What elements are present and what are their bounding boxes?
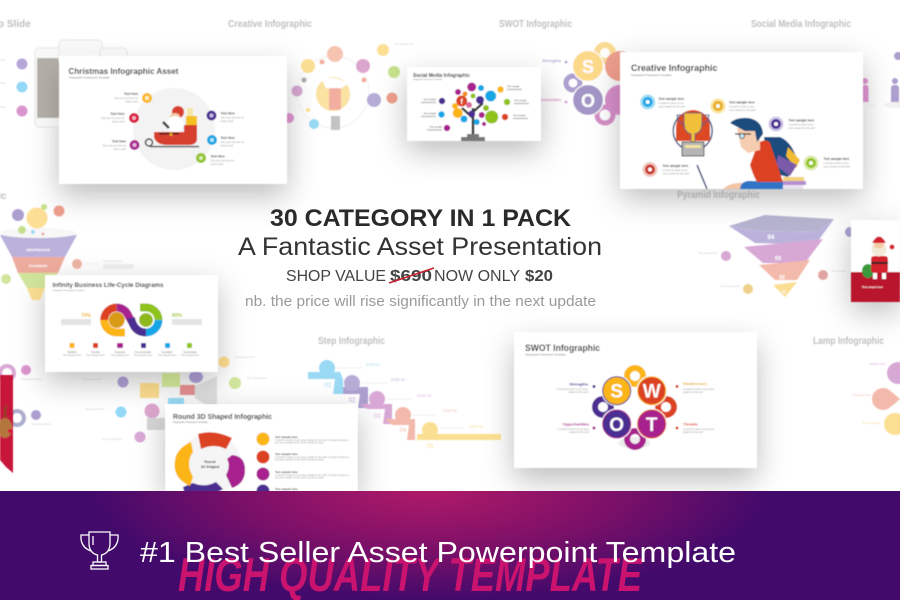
faded megaphone diagram: Text sample here [235, 355, 255, 359]
SWOT labels: details for this stuff [568, 391, 588, 394]
faded gears [0, 366, 24, 425]
six feature columns: Text sample here [111, 354, 130, 357]
SWOT labels: Opportunities [563, 422, 590, 426]
faded people icons [854, 52, 900, 108]
target labels: It would be better to put [662, 169, 688, 172]
faded step diagram: 04 [400, 428, 407, 434]
faded title: lamp: Lamp Infographic [813, 336, 884, 347]
faded funnel diagram [0, 204, 134, 300]
Santa slide text: Text sample here [862, 285, 884, 289]
round list items [256, 432, 350, 498]
labels around sleigh: better result [125, 100, 138, 104]
round segment chart [175, 432, 245, 497]
icon: trophy [81, 532, 118, 569]
target labels: It would be better to put [824, 162, 849, 165]
creative heading: Creative Infographic [631, 63, 718, 74]
target icons [640, 94, 818, 177]
target labels: Text sample here [788, 118, 815, 122]
labels around sleigh: Text Here [210, 154, 225, 158]
faded megaphone diagram: Text sample here [247, 376, 267, 380]
faded SWOT diagram: O [581, 91, 595, 111]
SWOT labels: It would be better to put some [683, 388, 715, 391]
labels around sleigh: Give your text here for [102, 144, 126, 148]
labels around sleigh: better result [220, 120, 233, 123]
six feature columns: Exquisite [115, 351, 126, 354]
target labels: some details for this stuff [729, 109, 756, 112]
Santa figure [862, 236, 894, 279]
faded megaphone diagram: Text sample here [102, 437, 122, 441]
six feature columns: Text sample here [134, 354, 153, 357]
SWOT labels: details for this stuff [569, 431, 589, 434]
SWOT clover: T [646, 415, 658, 436]
labels around sleigh: better result [113, 148, 126, 151]
panel: Creative infographic [620, 52, 863, 189]
faded title: pyramid: Pyramid Infographic [677, 190, 760, 201]
price line: SHOP VALUE [286, 268, 386, 285]
faded lamp diagram [852, 362, 900, 435]
target labels: some details for this stuff [662, 172, 689, 176]
social globe diagram [284, 42, 414, 130]
labels around sleigh [101, 92, 244, 166]
price line [286, 268, 553, 285]
faded pyramid diagram: 03 [775, 256, 781, 262]
round list items: Text sample here [275, 487, 298, 491]
six feature columns: Incredible [161, 351, 173, 354]
percent callouts [61, 313, 202, 325]
headline: fantastic asset: A Fantastic Asset Presentation [238, 233, 602, 261]
SWOT heading: SWOT Infographic [525, 343, 600, 353]
labels around sleigh: Text Here [220, 112, 235, 116]
labels around sleigh: Give your text here for [220, 116, 244, 120]
price note: nb. the price will rise significantly in the next update [245, 293, 596, 310]
headline: 30 category: 30 CATEGORY IN 1 PACK [270, 205, 572, 232]
faded background slides [0, 19, 900, 450]
labels around sleigh: Text Here [110, 112, 125, 116]
price line: NOW ONLY [434, 268, 520, 285]
social icons and labels: Text sample [513, 114, 526, 117]
faded step diagram: STEP 04 [443, 409, 457, 413]
faded megaphone diagram: Text sample here [85, 407, 105, 411]
social icons and labels: Text sample [424, 98, 437, 101]
SWOT clover: W [643, 382, 661, 402]
infinity heading: Infinity Business Life-Cycle Diagrams [52, 282, 164, 289]
faded SWOT diagram: Strengths [542, 58, 562, 63]
social heading: Social Media Infographic [413, 73, 470, 79]
faded lamp diagram: Template here [852, 393, 871, 397]
target labels: Text sample here [729, 100, 755, 104]
six feature columns: Sustainable [183, 351, 197, 354]
faded pyramid diagram [698, 215, 855, 297]
target labels [658, 97, 850, 176]
SWOT labels: It would be better to put some [556, 388, 589, 391]
left icons column: here [0, 105, 6, 109]
SWOT labels: Strengths [569, 382, 589, 386]
target labels: Text sample here [658, 97, 685, 101]
social icons and labels: Text sample [430, 126, 443, 128]
faded megaphone diagram: Text sample here [82, 377, 102, 381]
panel: Christmas infographic [59, 56, 287, 184]
grey circle backdrop [133, 88, 215, 170]
round segment chart: 3D Shaped [201, 465, 219, 469]
faded title: creative: Creative Infographic [228, 19, 312, 30]
six feature columns: Text sample here [181, 354, 200, 357]
round list items: put some details for the stuff it would be better [275, 458, 324, 462]
round list items: Text sample here [275, 470, 298, 474]
panel: SWOT infographic [514, 332, 757, 468]
tree chart: f [461, 99, 464, 106]
creative subtitle: Infographic Powerpoint Template [631, 73, 672, 77]
six feature columns: Reliable [67, 351, 77, 354]
faded pyramid diagram: 04 [768, 235, 775, 241]
panel: Social Media infographic [407, 67, 541, 141]
target labels: It would be better to put [788, 124, 814, 126]
infinity subtitle: Infographic Powerpoint Template [52, 289, 85, 292]
faded step diagram: STEP 05 [469, 425, 483, 429]
six feature columns [63, 343, 200, 357]
faded pyramid diagram: Text sample here [720, 284, 741, 288]
labels around sleigh: Text Here [124, 92, 138, 96]
Christmas heading: Christmas Infographic Asset [68, 66, 179, 76]
round list items: Text sample here [275, 452, 298, 456]
SWOT labels [556, 381, 715, 434]
faded lamp diagram: TEMPLATE [869, 362, 885, 366]
icons around sleigh [129, 93, 217, 163]
percent callouts: 80% [172, 313, 183, 319]
social icons and labels: Text sample [424, 112, 437, 115]
target labels: It would be better to put [658, 102, 684, 105]
round list items: put some details for the stuff it would be better [275, 442, 324, 444]
SWOT clover: S [610, 382, 623, 402]
labels around sleigh: better result [210, 163, 223, 166]
panel: Infinity business life-cycle [45, 275, 218, 372]
faded megaphone diagram: Text sample here [22, 377, 42, 381]
price line: $690 [390, 268, 432, 285]
panel: Round 3D shaped [165, 404, 358, 498]
faded title: SWOT: SWOT Infographic [499, 19, 572, 30]
SWOT subtitle: Infographic Powerpoint Template [525, 352, 566, 356]
central headline block [238, 205, 602, 310]
faded pyramid diagram: 02 [779, 275, 785, 281]
six feature columns: Flexible [91, 351, 101, 354]
social icons and labels: Text sample [507, 85, 520, 88]
faded pyramid diagram: Text sample here [698, 251, 719, 255]
faded step diagram: STEP 03 [417, 394, 431, 398]
target labels: some details for this stuff [658, 106, 685, 108]
SWOT labels: details for this stuff [683, 431, 703, 434]
left icons column: here [0, 81, 6, 85]
faded step diagram: 05 [427, 444, 434, 450]
bottom banner [0, 491, 900, 600]
six feature columns: Text sample here [86, 354, 105, 357]
faded funnel diagram: Text sample here [103, 259, 123, 263]
faded step diagram: 02 [349, 398, 356, 404]
Santa sleigh [146, 106, 200, 148]
percent callouts: 70% [81, 313, 92, 319]
faded step diagram: STEP 01 [366, 363, 380, 367]
SWOT clover: O [609, 415, 624, 436]
social icons and labels: Text sample [514, 99, 527, 102]
round segment chart: Round [204, 460, 216, 464]
six feature columns: Text sample here [158, 354, 177, 357]
student illustration [697, 118, 806, 189]
faded step diagram: STEP 02 [391, 378, 405, 382]
target labels: Text sample here [662, 164, 689, 168]
faded pyramid diagram: 01 [782, 289, 787, 294]
labels around sleigh: better result [220, 144, 233, 148]
phone mockups [35, 40, 127, 127]
target labels: some details for this stuff [788, 127, 815, 130]
faded lamp diagram: Text template [862, 421, 880, 425]
target labels: some details for this stuff [824, 166, 850, 168]
faded step diagram: 01 [325, 383, 332, 389]
faded SWOT diagram [535, 45, 635, 123]
Christmas subtitle: Infographic Powerpoint Template [69, 76, 110, 80]
labels around sleigh: Text Here [112, 140, 126, 144]
left icons column [0, 58, 28, 116]
banner headline: #1 Best Seller Asset Powerpoint Template [140, 537, 736, 569]
trophy illustration [673, 110, 712, 156]
left icons column: here [0, 58, 6, 62]
SWOT clover [595, 368, 674, 449]
faded title: step: Step Infographic [318, 336, 385, 347]
faded SWOT diagram: Opportunities [535, 97, 562, 102]
card shadows [45, 62, 900, 501]
round list items: It would be better to put some details for the stuff. It would be better to [275, 439, 350, 442]
faded step diagram: 03 [374, 414, 381, 420]
reindeer [0, 405, 12, 438]
faded SWOT diagram: S [582, 57, 594, 77]
round heading: Round 3D Shaped Infographic [173, 414, 272, 421]
price line: $20 [525, 268, 553, 285]
SWOT labels: Threats [683, 422, 698, 426]
faded title: social media: Social Media Infographic [751, 19, 851, 30]
faded funnel diagram: Advertisement [26, 248, 51, 252]
faded step diagram [308, 360, 501, 450]
labels around sleigh: Give your text here for [101, 117, 125, 120]
labels around sleigh: Give your text here for [220, 141, 244, 144]
SWOT labels: Weaknesses [683, 381, 708, 386]
six feature columns: Text sample here [63, 354, 82, 357]
panel: cropped red Christmas slide [0, 375, 13, 473]
SWOT labels: It would be better to put some [683, 428, 715, 431]
social globe diagram: Text sample here [394, 42, 414, 46]
labels around sleigh: Give your text here for [114, 97, 138, 100]
social icons and labels [421, 85, 529, 131]
round list items: Text sample here [275, 435, 298, 439]
faded funnel diagram: Investment [29, 264, 48, 268]
round list items: It would be better to put some details for the stuff. It would be better to [275, 474, 350, 477]
round list items: It would be better to put some details for the stuff. It would be better to [275, 456, 350, 459]
banner brush text: HIGH QUALITY TEMPLATE [178, 548, 643, 600]
faded megaphone diagram: Text sample here [31, 422, 51, 426]
SWOT labels: It would be better to put some [558, 428, 590, 431]
round subtitle: Infographic Powerpoint Template [173, 421, 208, 424]
target labels: Text sample here [824, 157, 850, 161]
target labels: It would be better to put [729, 106, 754, 108]
panel: small Santa slide [851, 220, 900, 302]
faded pyramid diagram: Text sample [832, 269, 846, 273]
six feature columns: Economicable [135, 351, 152, 354]
social subtitle: Infographic Powerpoint Template [413, 78, 443, 81]
labels around sleigh: Text Here [220, 136, 235, 140]
round list items: put some details for the stuff it would be better [275, 476, 324, 480]
faded megaphone diagram [21, 355, 267, 442]
labels around sleigh: Give your text here for [210, 160, 234, 162]
labels around sleigh: better result [112, 120, 125, 124]
SWOT labels: details for this stuff [683, 391, 703, 394]
infinity loop chart [104, 308, 158, 332]
